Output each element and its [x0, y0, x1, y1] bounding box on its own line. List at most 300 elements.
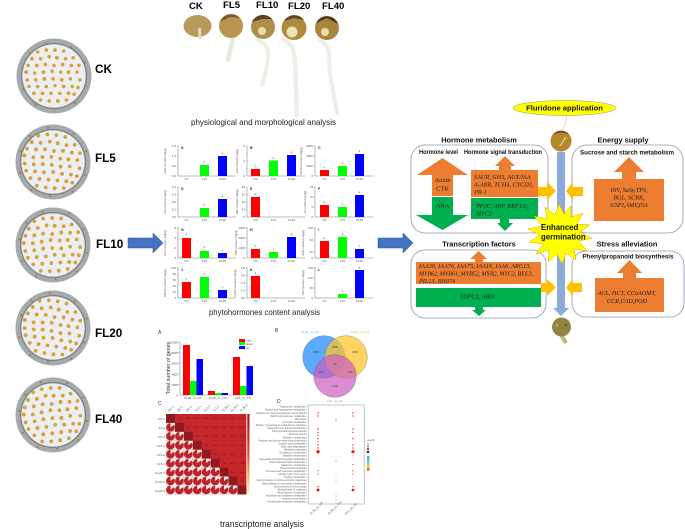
chart A: DEG counts: 4000	[171, 372, 178, 376]
chart B: Venn diagram: FL20_vs_CK	[301, 330, 319, 334]
upregulated transcription factors	[416, 251, 541, 285]
arrow: central germination axis	[553, 152, 569, 316]
panel: hormone metabolism	[411, 136, 548, 233]
chart D: KEGG dot plot	[256, 399, 375, 516]
chart D: KEGG dot plot: Alanine and aspartate metabolism	[267, 500, 306, 504]
chart C: FL20	[356, 177, 363, 181]
chart H: TRP content (ng/g)	[234, 230, 238, 256]
chart D: KEGG dot plot: Flavonoid biosynthesis	[280, 466, 307, 470]
chart L: b	[342, 289, 344, 293]
chart D: KEGG dot plot: Ubiquinone, terpenoid-quinone biosynthesis	[256, 411, 307, 415]
chart D: KEGG dot plot: Biosynthesis of amino acids	[274, 484, 307, 488]
chart D: KEGG dot plot: Photosynthesis	[289, 432, 307, 436]
chart C: correlation heatmap: FL5-3	[212, 404, 220, 413]
chart L: 0	[311, 296, 313, 300]
chart L: FL20	[356, 299, 363, 303]
chart H: H	[250, 228, 253, 232]
upregulated signal genes: SAUR, GH3, AUX/IAA	[474, 174, 531, 181]
chart I: c	[359, 244, 361, 248]
seedling labels: FL10	[256, 0, 278, 11]
seedling labels: FL40	[322, 1, 344, 12]
chart B: Venn diagram: 2589	[313, 350, 320, 354]
chart B: Venn diagram	[275, 328, 369, 403]
chart I: 100	[308, 226, 313, 230]
chart A: DEG counts: down	[246, 342, 254, 346]
chart E: 0	[243, 215, 245, 219]
chart E: 10	[242, 208, 245, 212]
upregulated signal genes: A-ARR, TCH4, CYCD3,	[473, 182, 534, 188]
chart C: correlation heatmap: CK-3	[185, 405, 193, 413]
chart C: correlation heatmap: FL5-1	[157, 444, 165, 448]
chart C: 3000	[306, 154, 313, 158]
seedling labels: FL5	[223, 0, 241, 11]
chart D: IPA content (ng/g)	[163, 190, 167, 214]
chart D: a	[222, 194, 224, 198]
chart I: 60	[310, 238, 313, 242]
arrow up: auxin and CTK	[417, 158, 468, 196]
chart D: KEGG dot plot: Pentose and glucuronate interconversions	[258, 438, 307, 442]
arrow: energy genes: INV, SuSy,TPS,	[609, 187, 648, 194]
sub-heading: hormone signal transduction: Hormone signal transduction	[464, 149, 542, 156]
chart E: FL5	[271, 218, 276, 222]
chart C: correlation heatmap: C	[158, 401, 162, 407]
chart D: KEGG dot plot: Plant hormone signal transduction	[267, 426, 307, 430]
chart C: correlation heatmap: FL5-2	[157, 453, 165, 457]
chart B: Venn diagram: FL20_vs_FL5	[351, 330, 369, 334]
chart B: 0	[243, 174, 245, 178]
chart A: A	[181, 146, 184, 150]
chart C: CK	[322, 177, 327, 181]
chart C: correlation heatmap: FL20-2	[155, 480, 165, 484]
chart D: KEGG dot plot: Biosynthesis of secondary metabolites	[262, 481, 307, 485]
chart B: IAA content (ng/g)	[235, 149, 239, 173]
chart J: 20	[173, 290, 176, 294]
chart A: DEG counts: total	[246, 338, 252, 342]
chart D: KEGG dot plot: Glycerophospholipid metabolism	[269, 460, 306, 464]
chart D: KEGG dot plot: Fatty acid degradation	[281, 444, 307, 448]
chart K: 0.0	[241, 296, 245, 300]
chart F: 10	[310, 195, 313, 199]
chart D: KEGG dot plot: Starch and sucrose metabolism	[270, 414, 306, 418]
petri dish: FL10	[16, 208, 90, 282]
chart I: 20	[310, 250, 313, 254]
arrow: phenylpropanoid genes	[595, 260, 664, 312]
chart C: correlation heatmap: 0.95 0.93 0.97 0.96 0.95 0.94 0.94 0.93	[177, 418, 244, 420]
chart D: b	[204, 203, 206, 207]
chart A: DEG counts: 0	[176, 394, 178, 398]
chart D: KEGG dot plot: FL20_vs_CK	[309, 501, 324, 516]
chart E: a	[255, 192, 257, 196]
chart B: b	[273, 156, 275, 160]
arrow: plates to analyses	[128, 233, 163, 253]
chart C: correlation heatmap: CK-1	[167, 405, 175, 413]
chart A: 0.0	[172, 174, 176, 178]
chart B: Venn diagram: 15	[333, 362, 337, 366]
chart D: KEGG dot plot: Phenylpropanoid biosynthesis	[272, 429, 307, 433]
chart L: CK	[322, 299, 327, 303]
chart I: FL5	[340, 259, 345, 263]
chart K: 0.6	[241, 274, 245, 278]
chart F: c	[342, 202, 344, 206]
chart A: CK	[184, 177, 189, 181]
chart D: KEGG dot plot: Carbon fixation in photosynthetic organisms	[256, 478, 307, 482]
chart D: KEGG dot plot: Ascorbate and aldarate metabolism	[266, 494, 306, 498]
chart H: 3000	[238, 226, 245, 230]
chart E: FL20	[288, 218, 295, 222]
chart D: KEGG dot plot: Linoleic acid metabolism	[278, 441, 306, 445]
chart K: 0.8	[241, 266, 245, 270]
petri dish: CK	[16, 38, 92, 114]
chart L: a	[359, 266, 361, 270]
chart A: DEG counts: FL20_vs_FL5	[209, 396, 227, 400]
chart C: correlation heatmap: CK-2	[176, 405, 184, 413]
chart H: CK	[253, 259, 258, 263]
chart A: GA3 content (ng/g)	[163, 148, 167, 174]
chart J: c	[222, 285, 224, 289]
arrow up: auxin and CTK: CTK	[436, 186, 449, 192]
chart E: 40	[242, 185, 245, 189]
chart A	[163, 144, 236, 181]
chart J: FL20	[219, 299, 226, 303]
chart A: DEG counts: 10000	[170, 340, 178, 344]
chart A: DEG counts: FL20_vs_CK	[184, 396, 202, 400]
arrow: phenylpropanoid genes: 4CL, HCT, CCoAOMT,	[598, 290, 656, 297]
chart D: CK	[184, 218, 189, 222]
chart G: FL20	[219, 259, 226, 263]
callout: enhanced germination starburst	[528, 204, 592, 264]
chart D: KEGG dot plot: Glutathione metabolism	[279, 451, 306, 455]
chart C: correlation heatmap: FL20-2	[230, 403, 240, 413]
chart D: KEGG dot plot: Galactose metabolism	[281, 463, 306, 467]
chart C: correlation heatmap: CK-3	[158, 435, 165, 439]
chart A: a	[222, 151, 224, 155]
chart J: b	[186, 277, 188, 281]
caption: transcriptome: transcriptome analysis	[220, 519, 305, 529]
upregulated signal genes: PR-1	[473, 189, 487, 196]
chart A: DEG counts: Total number of genes	[166, 341, 172, 394]
chart B: Venn diagram: 5856	[332, 345, 339, 349]
chart L: 150	[308, 266, 313, 270]
chart G: 8	[174, 226, 176, 230]
chart L: TRA content (ng/g)	[301, 270, 305, 296]
chart C	[299, 144, 373, 181]
chart F: 0	[311, 215, 313, 219]
chart H: 2000	[238, 236, 245, 240]
chart I: a	[342, 232, 344, 236]
chart G: b	[204, 245, 206, 249]
chart K: 0.4	[241, 281, 245, 285]
chart B: a	[291, 150, 293, 154]
chart F: a	[359, 190, 361, 194]
label: FL40: FL40	[95, 413, 123, 426]
chart D: 0.4	[172, 185, 176, 189]
chart C: correlation heatmap: 0.96 0.96 0.97 0.95 0.94 0.95	[195, 436, 245, 438]
chart D: KEGG dot plot: Histidine metabolism	[283, 454, 306, 458]
chart C: a	[359, 149, 361, 153]
chart D: 0.2	[172, 200, 176, 204]
chart D: 0.1	[172, 208, 176, 212]
callout: fluridone application: Fluridone application	[526, 104, 603, 112]
chart J: a	[204, 272, 206, 276]
chart C: correlation heatmap: CK-1	[158, 417, 165, 421]
panel: energy supply	[572, 136, 683, 233]
chart C: 5000	[306, 144, 313, 148]
chart C: correlation heatmap: FL5-3	[157, 462, 165, 466]
chart F: 15	[310, 185, 313, 189]
chart I: FL20	[356, 259, 363, 263]
arrow: phenylpropanoid genes: CCR,CAD,POD	[607, 298, 648, 305]
chart D: KEGG dot plot: Ribosome	[295, 417, 307, 421]
petri dish: FL20	[14, 288, 92, 368]
chart K: 0.2	[241, 288, 245, 292]
chart I: 0	[311, 256, 313, 260]
chart B: CK	[253, 177, 258, 181]
panel: seedling morphology	[184, 0, 344, 127]
chart A: DEG counts: up	[246, 346, 250, 350]
chart B: Venn diagram: 360	[348, 370, 353, 374]
chart J: 80	[173, 272, 176, 276]
chart J: CK	[184, 299, 189, 303]
chart D: KEGG dot plot: Metabolic pathways	[284, 448, 307, 452]
chart E: 30	[242, 192, 245, 196]
chart B: c	[255, 164, 257, 168]
chart D: KEGG dot plot: FL5_vs_CK	[344, 502, 358, 516]
chart I: SAG content (ng/g)	[301, 230, 305, 256]
arrow up: auxin and CTK: Auxin	[435, 177, 451, 184]
chart D: KEGG dot plot: D	[277, 399, 281, 405]
callout: enhanced germination starburst: Enhanced	[541, 223, 578, 232]
chart D: KEGG dot plot: Fructose and mannose metabolism	[266, 469, 306, 473]
chart J: 60	[173, 278, 176, 282]
chart C: correlation heatmap: FL20-1	[155, 471, 165, 475]
chart F: FL20	[356, 218, 363, 222]
chart G: 6	[174, 236, 176, 240]
chart A: b	[204, 160, 206, 164]
chart A: 1.5	[172, 144, 176, 148]
chart B: 4	[243, 144, 245, 148]
arrow down: ABA: ABA	[436, 202, 450, 210]
chart C: c	[324, 165, 326, 169]
chart C: correlation heatmap: CK-2	[158, 426, 165, 430]
chart D: KEGG dot plot: Carbon metabolism	[284, 475, 306, 479]
chart J	[163, 266, 236, 303]
chart J: OPDA content (ng/g)	[163, 269, 167, 297]
callout: enhanced germination starburst: germination	[541, 232, 586, 242]
chart F: 5	[311, 205, 313, 209]
chart C: correlation heatmap: FL20-3	[155, 489, 165, 493]
label: FL20: FL20	[95, 327, 123, 340]
chart C: correlation heatmap: FL5-1	[194, 404, 202, 413]
downregulated signal genes: PP2C, ABF, ERF1/2,	[475, 203, 529, 210]
label: CK: CK	[95, 63, 112, 76]
chart G: c	[222, 248, 224, 252]
chart K	[233, 266, 305, 303]
label: FL5: FL5	[95, 152, 116, 165]
chart G	[163, 226, 236, 263]
chart C: correlation heatmap: 0.97	[240, 481, 245, 483]
sub-heading: hormone level: Hormone level	[419, 149, 458, 156]
seedling labels: CK	[189, 1, 203, 12]
chart G: 2	[174, 246, 176, 250]
label: FL10: FL10	[96, 238, 124, 251]
upregulated transcription factors: MYB62, MYB61, MYB52, MYB2, MYC2, BEE3,	[418, 270, 533, 278]
chart A: DEG counts: 8000	[171, 351, 178, 355]
upregulated signal genes	[471, 156, 538, 197]
chart G: G	[181, 228, 184, 232]
chart B: FL5	[271, 177, 276, 181]
chart B	[235, 144, 305, 181]
chart A: DEG counts: 6000	[171, 362, 178, 366]
chart E: E	[250, 187, 253, 191]
chart C: C	[318, 146, 321, 150]
downregulated signal genes	[471, 198, 538, 231]
chart F: FL5	[340, 218, 345, 222]
upregulated transcription factors: PIL13, BH074	[418, 278, 455, 285]
chart B: Venn diagram: 3460	[352, 350, 359, 354]
chart B: B	[250, 146, 253, 150]
chart E: ABA content (ng/g)	[235, 189, 239, 215]
chart F: b	[324, 200, 326, 204]
chart K: K	[250, 268, 253, 272]
chart D: D	[181, 187, 184, 191]
chart L: 50	[310, 286, 313, 290]
chart H: b	[255, 244, 257, 248]
chart C: correlation heatmap: FL5-2	[203, 404, 211, 413]
chart F	[303, 185, 373, 222]
chart B: Venn diagram: 2120	[332, 384, 339, 388]
arrow: energy genes: BGL, SCRK,	[613, 194, 645, 202]
chart J: FL5	[202, 299, 207, 303]
chart G: 0	[174, 256, 176, 260]
chart D: KEGG dot plot: Arginine biosynthesis	[282, 497, 307, 501]
chart D: KEGG dot plot: Tryptophan metabolism	[279, 405, 306, 409]
callout: fluridone application	[513, 100, 616, 116]
panel: phytohormone bar charts	[163, 144, 373, 317]
chart K: GA19 content (ng/g)	[233, 269, 237, 297]
heading: Hormone metabolism	[441, 136, 517, 144]
chart H: c	[273, 247, 275, 251]
petri dish: FL40	[15, 376, 91, 454]
chart I: b	[324, 236, 326, 240]
icon: treated seed	[550, 130, 572, 152]
chart L: FL5	[340, 299, 345, 303]
chart C: FL5	[340, 177, 345, 181]
sub-heading: sucrose and starch: Sucrose and starch metabolism	[580, 150, 674, 156]
chart C: correlation heatmap: FL20-3	[239, 403, 249, 413]
chart D: KEGG dot plot: Biosynthesis of cofactors	[278, 487, 307, 491]
chart H: a	[291, 232, 293, 236]
chart E: CK	[253, 218, 258, 222]
chart H: 0	[243, 256, 245, 260]
heading: Transcription factors	[442, 240, 516, 248]
panel: stress alleviation	[572, 240, 684, 317]
chart K: FL20	[288, 299, 295, 303]
chart G: CK	[184, 259, 189, 263]
chart D: KEGG dot plot: Nitrogen metabolism	[283, 435, 306, 439]
chart G: FL5	[202, 259, 207, 263]
chart D: FL5	[202, 218, 207, 222]
chart A: DEG counts: A	[158, 330, 162, 336]
chart D: FL20	[219, 218, 226, 222]
seedling images	[184, 14, 339, 116]
chart C: correlation heatmap: 0.96 0.96 0.96	[222, 463, 245, 465]
chart C: b	[342, 161, 344, 165]
arrow: energy genes	[594, 157, 664, 221]
chart C: 0	[311, 174, 313, 178]
upregulated transcription factors: IAA30, IAA76, IAA75, IAA16, IAA6, ARG13,	[418, 263, 531, 270]
chart C: 1000	[306, 164, 313, 168]
chart F: JA content (ng/g)	[303, 191, 307, 213]
chart A: 0.5	[172, 164, 176, 168]
chart J: 100	[171, 266, 176, 270]
chart J: 40	[173, 284, 176, 288]
chart D: KEGG dot plot: Citrate cycle (TCA cycle)	[278, 472, 307, 476]
arrow: analyses to model	[378, 233, 413, 253]
chart L: L	[318, 268, 321, 272]
chart K: a	[255, 271, 257, 275]
chart A: FL20	[219, 177, 226, 181]
chart D: KEGG dot plot: Glyoxylate and dicarboxylate metabolism	[259, 457, 306, 461]
chart A: DEG counts	[158, 330, 254, 400]
chart C: correlation heatmap: 0.97 0.96 0.95 0.95 0.94	[204, 445, 245, 447]
arrows: yellow inputs	[538, 182, 583, 296]
chart A: DEG counts: FL5_vs_CK	[235, 396, 251, 400]
caption: morphology: physiological and morphological analysis	[191, 118, 336, 127]
chart B: FL20	[288, 177, 295, 181]
chart H: FL5	[271, 259, 276, 263]
chart A: 1.0	[172, 154, 176, 158]
chart H: FL20	[288, 259, 295, 263]
panel: transcription factors	[411, 240, 546, 318]
caption: phytohormones: phytohormones content analysis	[209, 308, 320, 317]
heading: Energy supply	[598, 136, 649, 144]
icon: germinated seed	[552, 318, 571, 343]
chart G: GA1 content (ng/g)	[163, 230, 167, 256]
chart D: KEGG dot plot: Pyruvate metabolism	[282, 420, 306, 424]
chart E	[235, 185, 305, 222]
chart E: 20	[242, 200, 245, 204]
chart K: FL5	[271, 299, 276, 303]
chart D: KEGG dot plot: Beta-Alanine metabolism	[278, 490, 306, 494]
chart A: FL5	[202, 177, 207, 181]
chart B: 2	[243, 159, 245, 163]
chart C: correlation heatmap: 0.97 0.96	[231, 472, 245, 474]
chart L: 100	[308, 276, 313, 280]
chart D	[163, 185, 236, 222]
chart B: Venn diagram: FL5_vs_CK	[327, 399, 343, 403]
chart D: KEGG dot plot: Protein processing in endoplasmic reticulum	[256, 423, 306, 427]
chart D: KEGG dot plot: count	[367, 438, 375, 442]
chart K: CK	[253, 299, 258, 303]
panel: transcriptome analysis	[155, 328, 375, 529]
chart C: correlation heatmap	[155, 401, 250, 494]
chart I	[301, 226, 373, 263]
arrow: application to seed	[562, 115, 567, 131]
heading: Stress alleviation	[597, 240, 658, 248]
chart F: CK	[322, 218, 327, 222]
chart B: Venn diagram: B	[275, 328, 279, 334]
sub-heading: phenylpropanoid: Phenylpropanoid biosynthesis	[582, 254, 674, 260]
chart H	[234, 226, 305, 263]
chart J: J	[181, 268, 183, 272]
chart D: KEGG dot plot: FL20_vs_FL5	[327, 500, 343, 516]
chart C: SaAG content (ng/g)	[299, 147, 303, 175]
chart F: F	[318, 187, 321, 191]
chart I: I	[318, 228, 319, 232]
downregulated transcription factors: TDPC2, ABI3	[460, 294, 494, 300]
chart C: correlation heatmap: 0.97 0.96 0.96 0.95	[213, 454, 245, 456]
downregulated signal genes: MYC2	[475, 210, 492, 218]
